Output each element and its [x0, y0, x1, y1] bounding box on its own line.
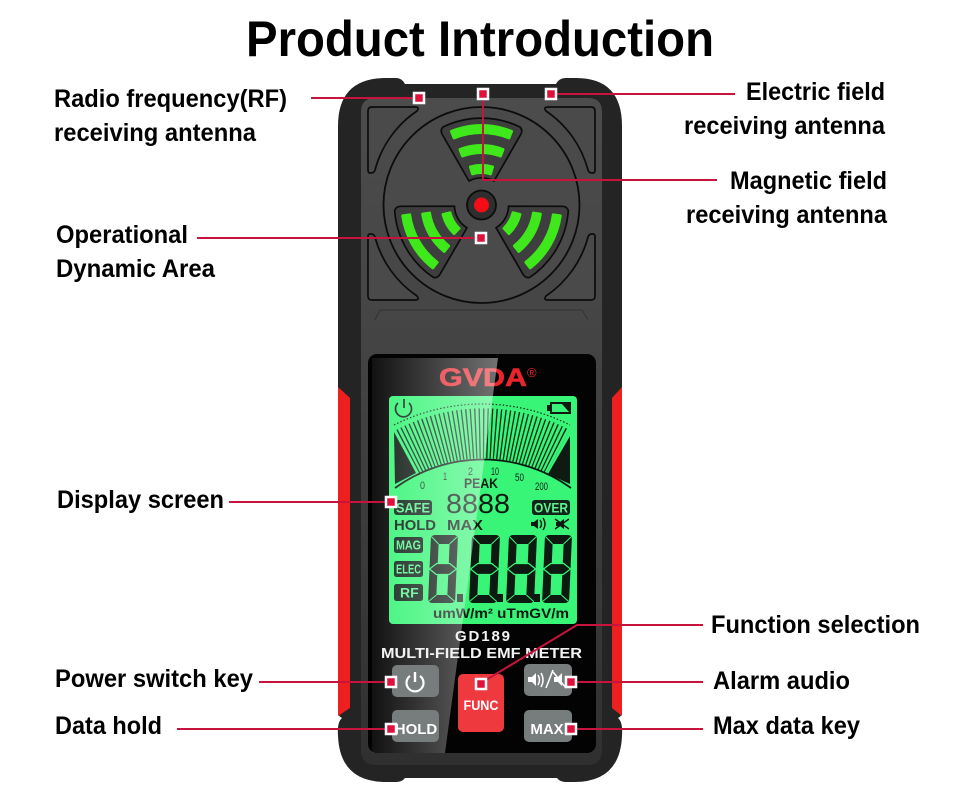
red side grip left: [338, 387, 350, 716]
callout: alarm audio: Alarm audio: [713, 667, 850, 695]
scale numbers: 0: [420, 480, 425, 492]
meter wedge right: [548, 436, 570, 484]
callout: electric field antenna: Electric field: [746, 78, 885, 106]
alarm audio button: [524, 664, 572, 696]
LCD display: [389, 396, 577, 624]
device outer housing: [338, 78, 622, 782]
hold and max labels: HOLD: [394, 517, 436, 534]
callout: magnetic field antenna: receiving antenna: [686, 201, 888, 229]
red side grip right: [612, 387, 622, 716]
hold and max labels: MAX: [447, 517, 483, 534]
callout: RF antenna: Radio frequency(RF): [54, 85, 287, 113]
LCD background: [389, 396, 577, 624]
antenna segment lower left: [386, 182, 481, 283]
unit labels: umW/m² uTmGV/m: [433, 605, 569, 621]
antenna segment lower right: [482, 182, 577, 283]
scale numbers: [420, 466, 548, 493]
max button: [524, 710, 572, 742]
callout: magnetic field antenna: [478, 89, 888, 229]
callout: magnetic field antenna: Magnetic field: [730, 167, 887, 195]
callout: max data key: Max data key: [713, 712, 860, 740]
screen glare: [372, 358, 498, 753]
callout: RF antenna: [54, 85, 424, 147]
scale numbers: 2: [468, 466, 473, 478]
corner pad top left: [368, 107, 418, 173]
mode badge ELEC: [394, 561, 423, 577]
function button: FUNC: [464, 697, 498, 713]
max button: MAX: [530, 721, 564, 738]
brand logo: ®: [527, 365, 537, 380]
power button: [392, 665, 439, 697]
callout: display screen: [57, 486, 396, 514]
callout: display screen: Display screen: [57, 486, 224, 514]
peak label: PEAK: [464, 475, 498, 491]
hold button: HOLD: [395, 721, 437, 738]
scale numbers: 50: [515, 472, 524, 484]
model name: GD189: [455, 628, 510, 645]
corner pad bottom right: [545, 234, 595, 300]
callout: electric field antenna: receiving antenna: [684, 112, 886, 140]
callout: power switch key: Power switch key: [55, 665, 253, 693]
panel seam: [375, 310, 588, 320]
meter scale arc: [395, 459, 571, 488]
power symbol: [396, 399, 412, 417]
mode badge ELEC: ELEC: [396, 562, 421, 576]
scale numbers: 200: [535, 481, 548, 493]
callout: RF antenna: receiving antenna: [54, 119, 257, 147]
hold button: [392, 710, 439, 742]
peak readout: 8888: [446, 488, 510, 519]
callout: function selection: Function selection: [711, 611, 920, 639]
centre indicator: [467, 190, 496, 220]
meter dotted arc: [394, 404, 570, 425]
lower body panel: [361, 320, 602, 765]
callout: electric field antenna: [546, 78, 886, 140]
over badge: OVER: [534, 500, 568, 516]
antenna segment top: [441, 118, 522, 181]
hold and max labels: [394, 517, 483, 534]
scale numbers: 10: [491, 466, 499, 478]
mode badge RF: RF: [400, 584, 419, 600]
device: EMF meter: [338, 78, 622, 782]
meter bars: [408, 433, 558, 452]
speaker icons: [531, 518, 569, 530]
safe badge: SAFE: [396, 500, 430, 516]
meter wedge left: [394, 432, 416, 484]
callout: data hold: Data hold: [55, 712, 162, 740]
callout: alarm audio: [566, 667, 850, 695]
corner pad top right: [545, 107, 595, 173]
brand logo: GVDA: [439, 364, 527, 392]
product name: MULTI-FIELD EMF METER: [381, 645, 582, 662]
mode badge MAG: MAG: [396, 538, 421, 552]
mode badge RF: [394, 584, 423, 601]
function button: [458, 674, 504, 732]
callout: function selection: [476, 611, 920, 689]
corner pad bottom left: [368, 234, 418, 300]
callout: power switch key: [55, 665, 396, 693]
callout: max data key: [566, 712, 860, 740]
scale numbers: 1: [443, 471, 447, 483]
callout: operational dynamic area: Operational: [56, 221, 188, 249]
callout: operational dynamic area: [56, 221, 486, 283]
battery icon: [547, 402, 571, 414]
upper sensor panel: [361, 98, 602, 320]
main segment readout: [428, 535, 572, 603]
callout: operational dynamic area: Dynamic Area: [56, 255, 216, 283]
callout: data hold: [55, 712, 396, 740]
sensor ring: [384, 107, 580, 303]
title: Product Introduction: [246, 11, 714, 67]
screen bezel: [368, 354, 596, 753]
